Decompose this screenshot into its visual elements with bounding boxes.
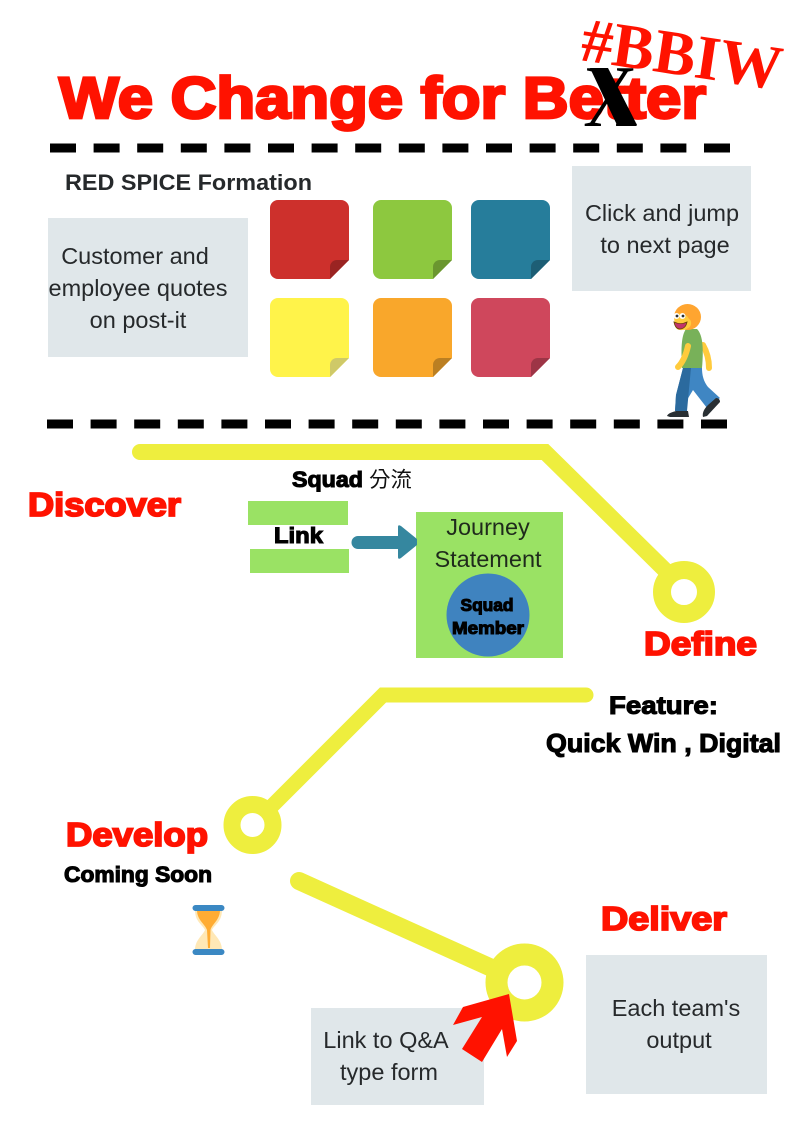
icon: hourglass <box>193 905 224 955</box>
post-it notes grid <box>270 200 550 377</box>
label: Define: Define <box>644 625 757 662</box>
panel: journey statement: Journey <box>446 514 530 540</box>
link bars: Link <box>274 523 324 548</box>
panel: customer and employee quotes: employee quotes <box>49 275 227 301</box>
post-it: orange <box>373 298 452 377</box>
panel: link to Q&A form: type form <box>340 1059 438 1085</box>
post-it: red <box>270 200 349 279</box>
circle: squad member <box>446 574 530 656</box>
panel: customer and employee quotes: on post-it <box>90 307 187 333</box>
text: Coming Soon: Coming Soon <box>64 862 212 887</box>
circle: squad member: Squad <box>460 595 514 615</box>
text: Feature: Feature: <box>609 692 718 720</box>
title: We Change for Better <box>59 66 706 131</box>
arrow: link to journey statement <box>352 525 417 559</box>
panel: each team's output: Each team's <box>612 995 740 1021</box>
post-it: crimson <box>471 298 550 377</box>
heading: Squad 分流: 分流 <box>369 463 412 494</box>
panel: each team's output <box>586 955 767 1094</box>
path: develop to deliver <box>299 881 552 1010</box>
path: define to develop <box>232 695 586 846</box>
heading: RED SPICE Formation: RED SPICE Formation <box>65 170 312 195</box>
panel: click and jump: Click and jump <box>585 200 739 226</box>
panel: customer and employee quotes: Customer and <box>61 243 209 269</box>
text: Quick Win, Digital: Quick Win , Digital <box>546 728 781 758</box>
panel: click and jump <box>572 166 751 291</box>
label: Develop: Develop <box>66 816 208 853</box>
panel: click and jump: to next page <box>600 232 730 258</box>
black X over title: X <box>583 49 638 146</box>
label: Deliver: Deliver <box>601 900 727 937</box>
panel: each team's output: output <box>646 1027 712 1053</box>
link bars <box>248 501 349 573</box>
panel: journey statement: Statement <box>434 546 542 572</box>
arrow: red pointer <box>453 994 517 1062</box>
heading: Squad 分流: Squad <box>292 467 363 492</box>
path: discover to define <box>140 452 706 614</box>
post-it: teal <box>471 200 550 279</box>
circle: squad member: Member <box>452 618 524 638</box>
heading: Squad 分流 <box>292 463 412 494</box>
label: Discover: Discover <box>28 486 181 523</box>
panel: link to Q&A form: Link to Q&A <box>323 1027 449 1053</box>
post-it: green <box>373 200 452 279</box>
panel: journey statement <box>416 512 563 658</box>
post-it: yellow <box>270 298 349 377</box>
icon: walking person <box>667 304 720 417</box>
panel: link to Q&A form <box>311 1008 484 1105</box>
panel: customer and employee quotes <box>48 218 248 357</box>
hashtag: #BBIW: #BBIW <box>577 5 787 104</box>
